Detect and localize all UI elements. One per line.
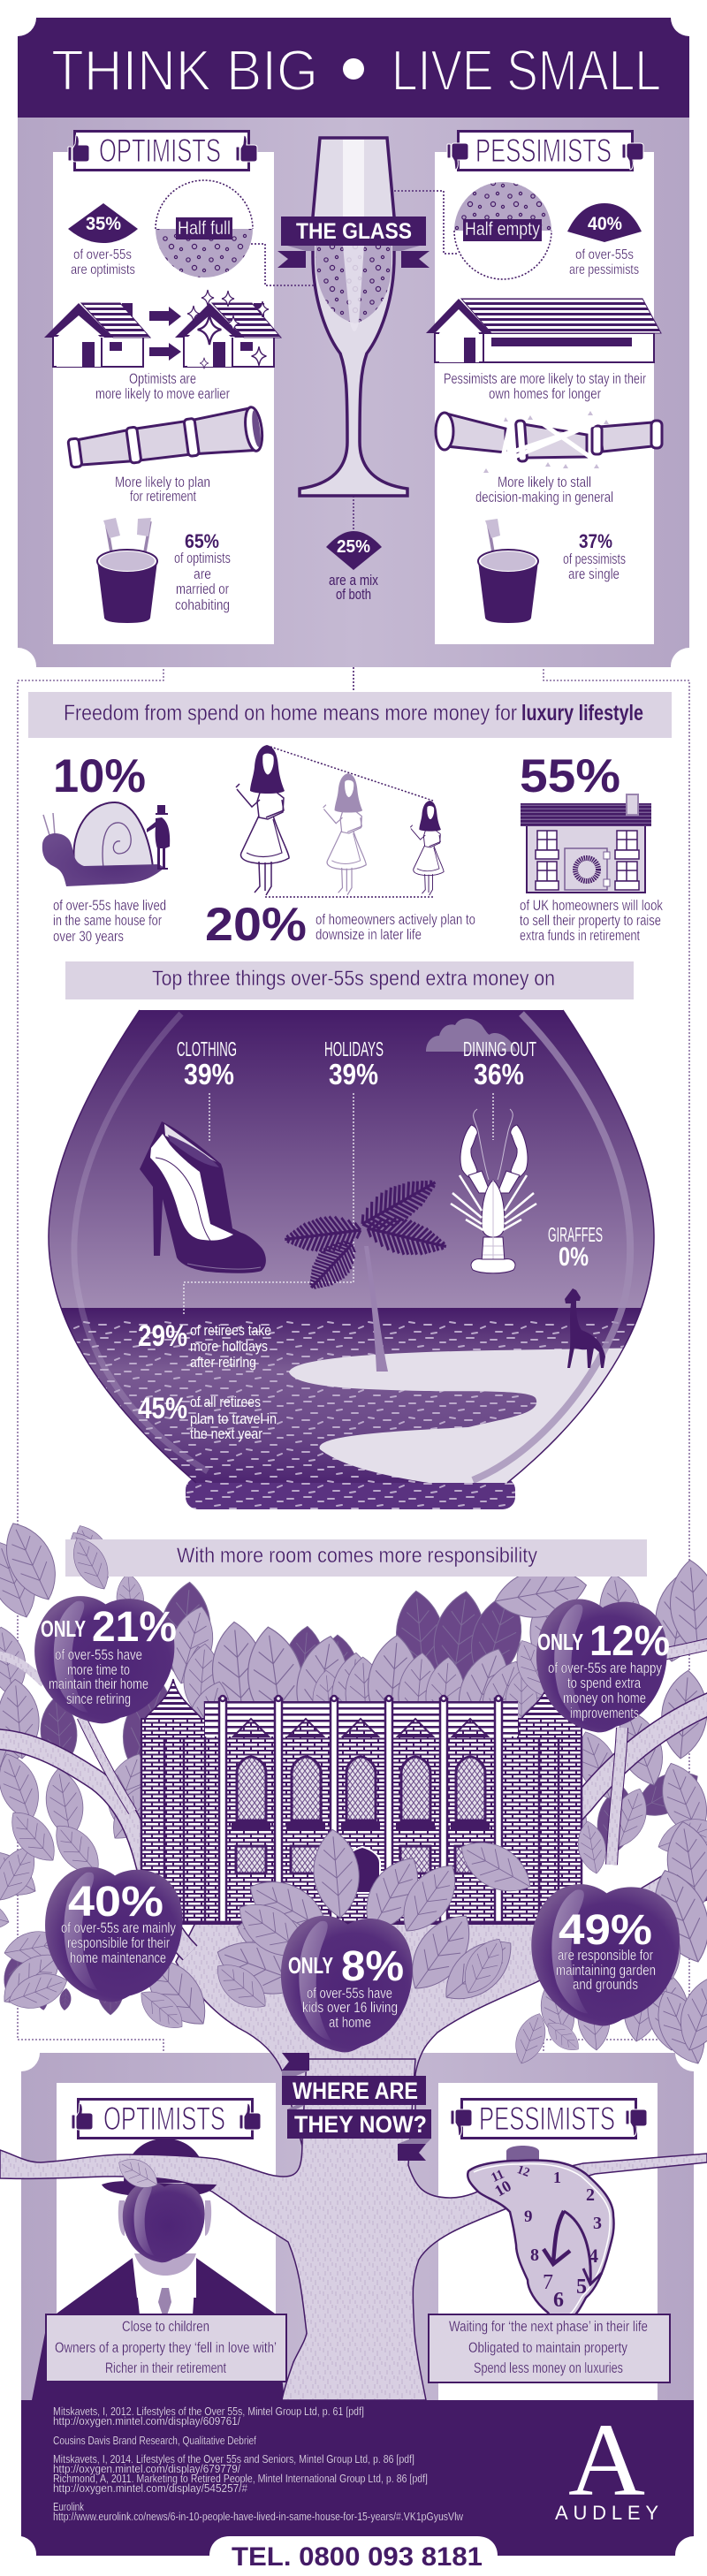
clock knob [506, 2146, 539, 2164]
front leaves [0, 1524, 691, 2068]
castle window ledges [232, 1822, 490, 1831]
references: http://oxygen.mintel.com/display/609761/ [53, 2414, 240, 2428]
apple: 8%: 8% [341, 1943, 404, 1990]
clock numerals: 3 [593, 2214, 602, 2233]
castle columns [219, 1696, 502, 1922]
text: plan for retirement: More likely to plan [115, 474, 210, 490]
stat: 25% mix: are a mix [329, 572, 378, 589]
apple: 40%: home maintenance [70, 1949, 166, 1966]
stat: 10% same house: 10% [53, 750, 146, 802]
pessimists outcomes box [429, 2314, 670, 2382]
clock numerals: 6 [553, 2289, 564, 2312]
chin [134, 2253, 196, 2276]
giraffes label: GIRAFFES [548, 1223, 603, 1246]
audley logo [555, 2402, 658, 2524]
heading: responsibility banner [65, 1539, 647, 1577]
apple: 12%: ONLY [537, 1629, 583, 1655]
references: Cousins Davis Brand Research, Qualitative Debrief [53, 2434, 256, 2447]
icon: safe house [521, 794, 651, 893]
stat: 20% downsize: downsize in later life [315, 926, 422, 943]
icon: top hat man [147, 805, 170, 870]
icon: lobster [451, 1109, 536, 1273]
half empty label: Half empty [465, 219, 540, 239]
dotted connector lines [18, 644, 689, 2098]
stat: 55% sell property [520, 750, 663, 944]
icon: thumb up [68, 135, 89, 162]
stat: 37% single: of pessimists [563, 551, 626, 567]
shirt [133, 2258, 196, 2315]
icon: thumb down [447, 143, 468, 170]
lower trunk and branches [0, 2059, 707, 2400]
stat: 10% same house: over 30 years [53, 928, 124, 945]
stat: 55% sell property: to sell their property to raise [520, 912, 661, 929]
clock numerals: 1 [553, 2169, 561, 2186]
references: http://oxygen.mintel.com/display/679779/ [53, 2462, 240, 2475]
ears [118, 2200, 211, 2236]
stat: 45% travel: of all retirees [190, 1394, 261, 1410]
castle central roof [205, 1701, 518, 1736]
clock numerals: 10 [491, 2177, 514, 2200]
stat: 40% pessimists: 40% [588, 214, 622, 234]
heading: top three banner: Top three things over-55s spend extra money on [152, 967, 555, 991]
clock numerals [489, 2163, 602, 2312]
optimists label: OPTIMISTS [99, 133, 221, 169]
icon: telescope [67, 407, 264, 475]
stat: 55% sell property: 55% [520, 750, 620, 802]
castle door [345, 1847, 380, 1893]
optimists outcomes box: Owners of a property they ‘fell in love with’ [55, 2339, 277, 2356]
icon: high heel shoe [140, 1121, 266, 1273]
stat: 40% pessimists [567, 203, 642, 277]
they now label: THEY NOW? [294, 2111, 427, 2138]
castle walls [141, 1736, 582, 1924]
stat: 25% mix [326, 531, 382, 603]
text: stay longer [444, 370, 646, 402]
stat: 65% married: married or [176, 581, 229, 597]
icon: thumb up right [236, 135, 257, 162]
pessimists outcomes box: Obligated to maintain property [468, 2339, 627, 2356]
apple: 21%: more time to [67, 1661, 130, 1678]
title bullet [343, 58, 364, 80]
apple: 12%: 12% [589, 1618, 670, 1665]
optimists outcomes box: Richer in their retirement [105, 2359, 226, 2376]
apple leaf [113, 2152, 163, 2195]
castle gables [233, 1719, 488, 1736]
half empty circle [454, 182, 551, 279]
apple: 8%: kids over 16 living [302, 1999, 398, 2016]
optimists outcomes box [46, 2314, 286, 2382]
sand [289, 1349, 623, 1483]
bowl outline [49, 1010, 654, 1483]
icon: small house [44, 303, 150, 367]
stat: 40% pessimists: of over-55s [575, 247, 634, 262]
stat: 35% optimists: of over-55s [73, 247, 132, 262]
apple: 12% [536, 1600, 670, 1732]
stat: 55% sell property: of UK homeowners will look [520, 897, 663, 914]
stat: 65% married [174, 530, 231, 613]
holidays value: 39% [329, 1058, 378, 1090]
clothing label: CLOTHING [177, 1037, 237, 1060]
stat: 25% mix: 25% [337, 537, 370, 557]
icon: melting clock [468, 2146, 614, 2320]
illustration: castle [141, 1679, 582, 1925]
stat: 37% single: are single [568, 566, 620, 582]
stat: 45% travel: plan to travel in [190, 1410, 277, 1427]
castle lower windows [236, 1846, 485, 1873]
references: Mitskavets, I, 2012. Lifestyles of the Over 55s, Mintel Group Ltd, p. 61 [pdf] [53, 2405, 364, 2418]
glass connectors [251, 191, 458, 531]
apple: 21%: maintain their home [49, 1676, 148, 1692]
stat: 65% married: are [194, 566, 211, 582]
text: move earlier: Optimists are [129, 370, 196, 387]
pessimists window [438, 2083, 658, 2400]
clock numerals: 12 [515, 2163, 531, 2180]
icon: broken telescope [436, 411, 662, 473]
pessimists label: PESSIMISTS [475, 133, 612, 169]
cloud [426, 1018, 517, 1052]
audley logo: AUDLEY [555, 2502, 658, 2524]
bowl foot [186, 1478, 515, 1509]
the glass ribbon [277, 217, 430, 268]
references [53, 2405, 463, 2523]
icon: sparkling house [175, 290, 281, 369]
leaf over banner [65, 1531, 118, 1596]
icon: palm tree [283, 1167, 450, 1372]
audley logo: A [568, 2402, 645, 2518]
arrows between houses [149, 307, 181, 361]
apple: 21% [34, 1596, 177, 1723]
heading: top three banner [65, 961, 634, 999]
stat: 10% same house: of over-55s have lived [53, 897, 166, 914]
text: stall decision-making [475, 474, 613, 505]
pessimists outcomes box: Spend less money on luxuries [474, 2359, 623, 2376]
castle right tower roof [521, 1679, 578, 1719]
holidays label: HOLIDAYS [324, 1037, 384, 1060]
apple: 8%: at home [329, 2014, 371, 2031]
references: http://www.eurolink.co/news/6-in-10-people-have-lived-in-same-house-for-15-years/#.VK1pGyusVlw [53, 2510, 463, 2523]
clock numerals: 4 [589, 2245, 598, 2267]
icon: toothbrush cup right [478, 519, 538, 623]
panel: glass comparison [18, 100, 689, 667]
where are they now ribbon [282, 2053, 431, 2161]
apple: 12%: money on home [563, 1690, 646, 1706]
text: move earlier [95, 370, 230, 402]
hat brim [102, 2181, 217, 2197]
clock numerals: 11 [489, 2168, 506, 2185]
clothing value: 39% [184, 1058, 234, 1090]
where are label: WHERE ARE [293, 2078, 418, 2104]
giraffes value: 0% [559, 1242, 589, 1272]
stat: 29% holidays: of retirees take [190, 1322, 271, 1339]
apple: 8%: ONLY [288, 1952, 333, 1979]
text: plan for retirement: for retirement [130, 488, 196, 505]
illustration: man [32, 2139, 285, 2400]
clock numerals: 9 [524, 2207, 532, 2226]
illustration: fishbowl [35, 1010, 672, 1509]
clock hands [544, 2211, 570, 2264]
stat: 29% holidays: more holidays [190, 1338, 268, 1355]
castle left tower roof [145, 1679, 201, 1719]
medium alice [323, 773, 366, 895]
apple: 49% [531, 1884, 680, 2025]
stat: 20% downsize [205, 899, 475, 951]
apple: 49%: maintaining garden [556, 1962, 656, 1979]
stat: 29% holidays [138, 1319, 271, 1371]
stat: 20% downsize: of homeowners actively plan to [315, 911, 475, 928]
icon: toothbrush cup single left [97, 518, 157, 623]
apple: 8% [281, 1916, 413, 2052]
icon: champagne glass [300, 138, 407, 496]
references: Mitskavets, I, 2014. Lifestyles of the Over 55s and Seniors, Mintel Group Ltd, p. 86 [pdf] [53, 2452, 414, 2466]
icon: giraffe [565, 1288, 605, 1368]
clock numerals: 5 [576, 2276, 587, 2299]
apple: 21%: ONLY [41, 1615, 86, 1642]
pessimists sign [447, 131, 643, 170]
icon: large house [426, 299, 661, 362]
text: plan for retirement [115, 474, 210, 505]
icon: thumb down right [622, 143, 643, 170]
tree leaves behind [0, 1515, 707, 2072]
apple: 8%: of over-55s have [307, 1985, 392, 2002]
apple: 49%: 49% [559, 1907, 652, 1954]
apple: 40%: of over-55s are mainly [61, 1919, 176, 1936]
text: move earlier: more likely to move earlier [95, 385, 230, 402]
stat: 10% same house [42, 750, 170, 945]
panel: where are they now [21, 2053, 694, 2400]
dining out label: DINING OUT [463, 1037, 536, 1060]
bowler hat [124, 2139, 206, 2183]
phone number: TEL. 0800 093 8181 [232, 2542, 483, 2572]
heading: responsibility banner: With more room comes more responsibility [177, 1544, 537, 1568]
stat: 45% travel [138, 1392, 277, 1442]
stat: 37% single: 37% [579, 530, 612, 552]
text: stay longer: Pessimists are more likely to stay in their [444, 370, 646, 387]
references: http://oxygen.mintel.com/display/545257/# [53, 2481, 248, 2495]
text: stall decision-making: decision-making in general [475, 489, 613, 505]
stat: 45% travel: 45% [138, 1392, 187, 1425]
apple: 21%: since retiring [66, 1691, 131, 1707]
title text left: THINK BIG [51, 38, 318, 103]
optimists sign [68, 131, 257, 170]
stat: 29% holidays: after retiring [190, 1354, 256, 1371]
castle arched windows [237, 1757, 485, 1820]
phone tab [209, 2536, 498, 2576]
stat: 65% married: cohabiting [175, 597, 230, 613]
stat: 65% married: of optimists [174, 550, 231, 566]
stat: 25% mix: of both [336, 586, 371, 603]
upper trunk mass [176, 1847, 707, 2156]
apple: 21%: of over-55s have [55, 1646, 142, 1663]
panel: pessimists column [435, 152, 654, 644]
apple: 12%: improvements [570, 1705, 639, 1721]
stat: 10% same house: in the same house for [53, 912, 162, 929]
optimists outcomes box: Close to children [122, 2318, 209, 2335]
stat: 35% optimists [68, 203, 138, 277]
clock numerals: 2 [586, 2185, 595, 2205]
stat: 65% married: 65% [185, 530, 219, 552]
suit [32, 2258, 285, 2400]
stat: 45% travel: the next year [190, 1425, 262, 1442]
stat: 55% sell property: extra funds in retirement [520, 927, 640, 944]
stat: 29% holidays: 29% [138, 1319, 187, 1353]
dining out value: 36% [474, 1058, 524, 1090]
clock numerals: 8 [530, 2245, 539, 2265]
apple: 12%: to spend extra [567, 1675, 641, 1691]
title banner [18, 18, 689, 118]
branches [0, 1644, 707, 1953]
icon: snail [42, 802, 170, 886]
apple: 40%: responsibile for their [67, 1934, 170, 1951]
optimists window [57, 2083, 276, 2400]
references: Eurolink [53, 2500, 84, 2513]
apple: 12%: of over-55s are happy [548, 1660, 662, 1676]
large alice [236, 745, 289, 895]
bowl reflections [74, 1014, 208, 1471]
stat: 20% downsize: 20% [205, 899, 307, 951]
illustration: shrinking alice [236, 745, 444, 897]
stat: 35% optimists: are optimists [71, 262, 135, 277]
heading: freedom banner: Freedom from spend on home means more money for [64, 701, 517, 726]
text: stay longer: own homes for longer [489, 385, 601, 402]
apple: 49%: are responsible for [558, 1947, 653, 1964]
optimists sign lower: OPTIMISTS [103, 2101, 225, 2137]
pessimists outcomes box: Waiting for ‘the next phase’ in their life [449, 2318, 648, 2335]
apple: 49%: and grounds [573, 1976, 638, 1993]
stat: 35% optimists: 35% [86, 214, 121, 234]
apple: 21%: 21% [92, 1604, 177, 1651]
white leader lines [184, 1093, 493, 1315]
heading: freedom banner: luxury lifestyle [521, 701, 643, 726]
castle crenellations [141, 1719, 582, 1738]
footer panel [21, 2400, 694, 2576]
the glass label: THE GLASS [296, 219, 412, 244]
illustration: apple face [102, 2152, 217, 2276]
panel: optimists column [53, 152, 274, 644]
tie [158, 2288, 171, 2315]
apple: 40% [45, 1867, 182, 2002]
sky [35, 1010, 672, 1308]
stat: 40% pessimists: are pessimists [569, 262, 639, 277]
stat: 37% single [563, 530, 626, 582]
half full label: Half full [178, 218, 231, 239]
small alice [410, 801, 444, 895]
clock numerals: 7 [543, 2271, 553, 2294]
half full circle [156, 180, 253, 277]
sea [35, 1308, 672, 1485]
references: Richmond, A, 2011. Marketing to Retired People, Mintel International Group Ltd, p. 86 [pdf] [53, 2472, 428, 2485]
text: stall decision-making: More likely to stall [498, 474, 591, 490]
pessimists sign lower: PESSIMISTS [479, 2101, 615, 2137]
apple: 40%: 40% [68, 1879, 163, 1926]
heading: freedom banner [28, 692, 672, 738]
